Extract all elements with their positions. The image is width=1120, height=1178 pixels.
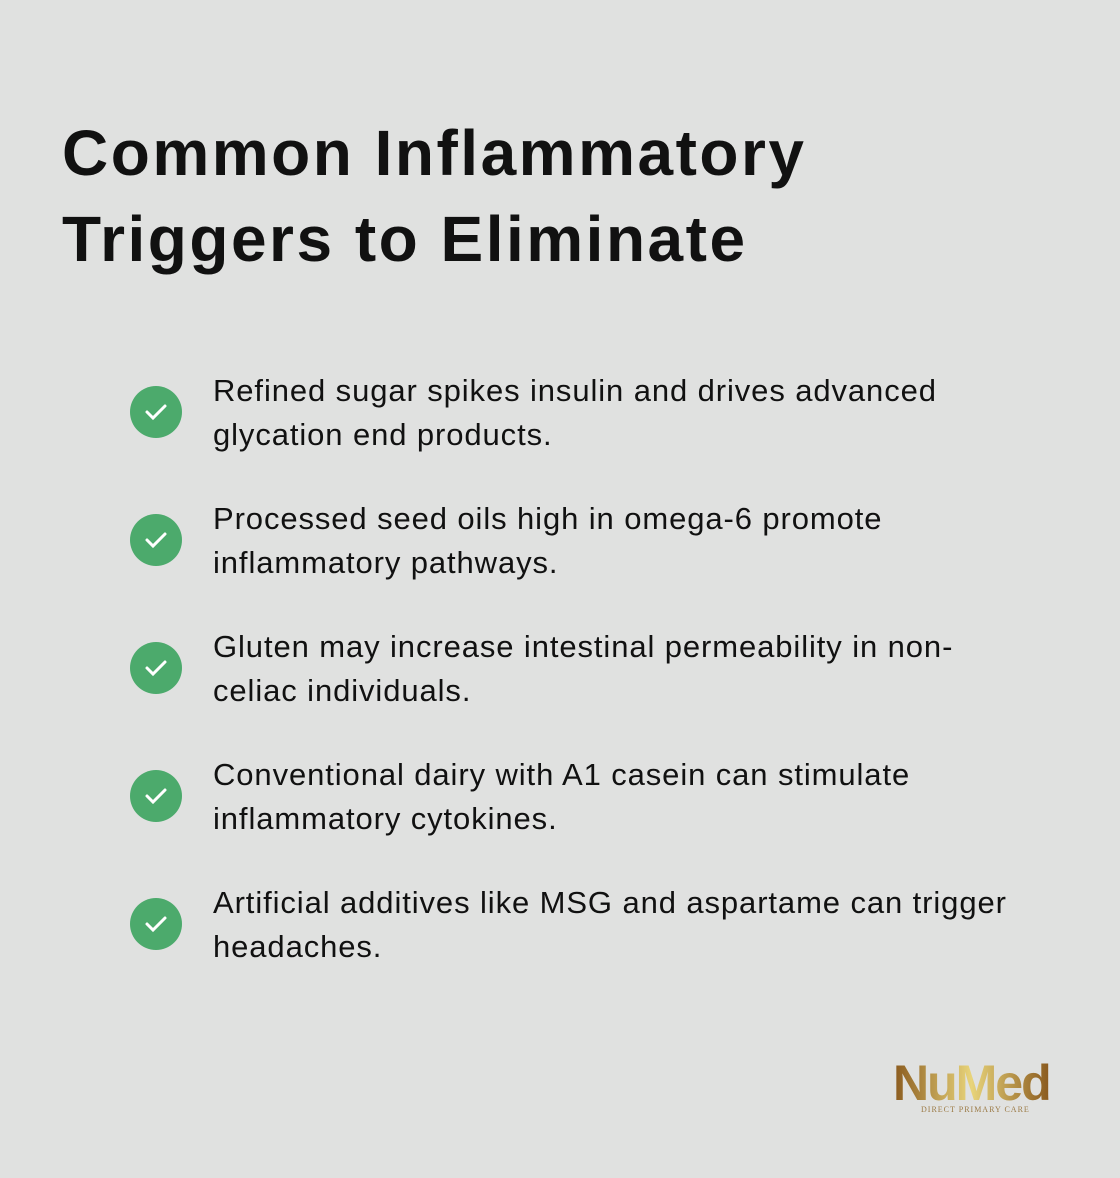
logo: DIRECT PRIMARY CARE [921,1105,1030,1114]
title: Triggers to Eliminate [62,203,748,275]
item 1: Refined sugar spikes insulin and drives advanced [213,373,937,408]
title [62,117,806,275]
item 2 [130,501,882,580]
logo: NuMed [893,1055,1050,1111]
item 2: inflammatory pathways. [213,545,558,580]
item 3: celiac individuals. [213,673,471,708]
item 4 [130,757,910,836]
item 5 [130,885,1007,964]
item 4: inflammatory cytokines. [213,801,558,836]
item 3 [130,629,953,708]
item 5: Artificial additives like MSG and aspartame can trigger [213,885,1007,920]
item 4: Conventional dairy with A1 casein can stimulate [213,757,910,792]
item 1: glycation end products. [213,417,553,452]
item 1 [130,373,937,452]
title: Common Inflammatory [62,117,806,189]
item 2: Processed seed oils high in omega-6 promote [213,501,882,536]
item 3: Gluten may increase intestinal permeability in non- [213,629,953,664]
item 5: headaches. [213,929,382,964]
